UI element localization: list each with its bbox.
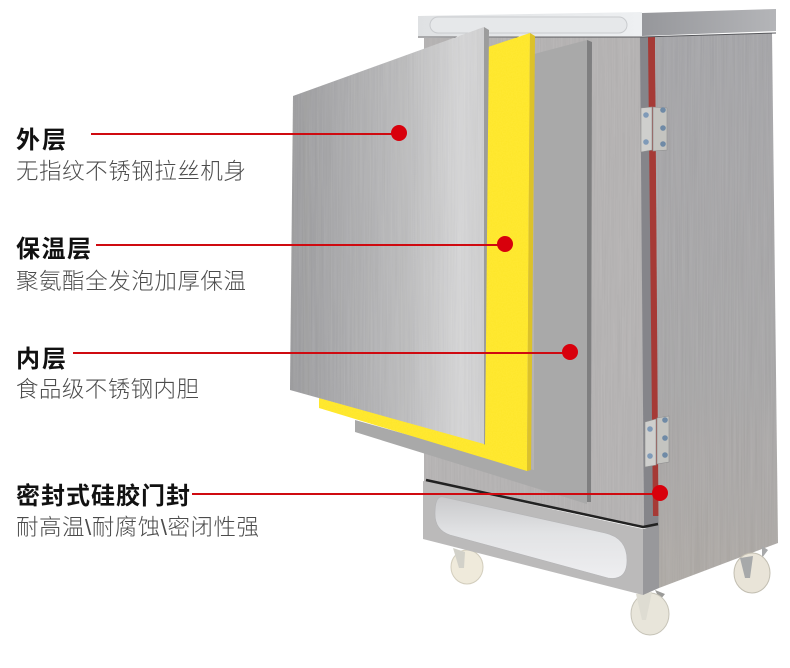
inner layer panel xyxy=(355,40,592,504)
callout: outer layer: 无指纹不锈钢拉丝机身 xyxy=(16,159,246,184)
callout: insulation layer: 聚氨酯全发泡加厚保温 xyxy=(16,269,246,294)
cabinet side panel xyxy=(655,33,778,588)
callout: door seal xyxy=(16,482,668,540)
caster wheels xyxy=(451,546,770,635)
callout: outer layer: 外层 xyxy=(16,127,66,154)
callout: door seal: 密封式硅胶门封 xyxy=(16,482,190,510)
callout: inner layer: 食品级不锈钢内胆 xyxy=(16,377,199,402)
callout: insulation layer xyxy=(16,236,513,294)
base handle panel xyxy=(423,480,659,595)
callout: inner layer xyxy=(16,344,578,402)
callout: outer layer xyxy=(16,125,407,184)
top lid xyxy=(418,9,776,37)
outer layer panel xyxy=(290,27,489,445)
callout: door seal: 耐高温\耐腐蚀\密闭性强 xyxy=(16,515,259,540)
callout: insulation layer: 保温层 xyxy=(16,236,91,263)
insulation layer foam xyxy=(319,33,535,471)
callout: inner layer: 内层 xyxy=(16,346,66,373)
upper hinge xyxy=(641,107,667,152)
cabinet front body xyxy=(424,37,659,528)
lower hinge xyxy=(645,416,669,467)
silicone door seal strip xyxy=(648,37,659,516)
cabinet illustration xyxy=(290,9,778,635)
